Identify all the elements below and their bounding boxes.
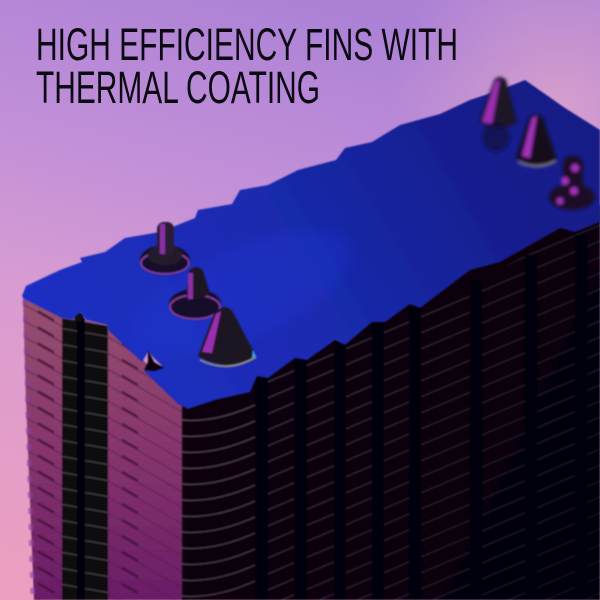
heading: THERMAL COATING: [36, 62, 320, 113]
plate highlight: [112, 205, 368, 385]
top plate: [22, 80, 600, 409]
fin post tab on plate edge: [144, 350, 164, 371]
cap 6: [549, 156, 595, 210]
cap 1: [140, 222, 190, 275]
cap 5: [516, 114, 557, 166]
heatpipe caps left: [140, 222, 257, 366]
right face fins: [182, 205, 600, 600]
cap 3: [198, 307, 257, 366]
heatpipe caps right: [479, 77, 595, 210]
heading: [36, 19, 458, 113]
cap 2: [169, 267, 221, 319]
cap 4: [479, 77, 517, 152]
left face fins: [23, 298, 183, 600]
